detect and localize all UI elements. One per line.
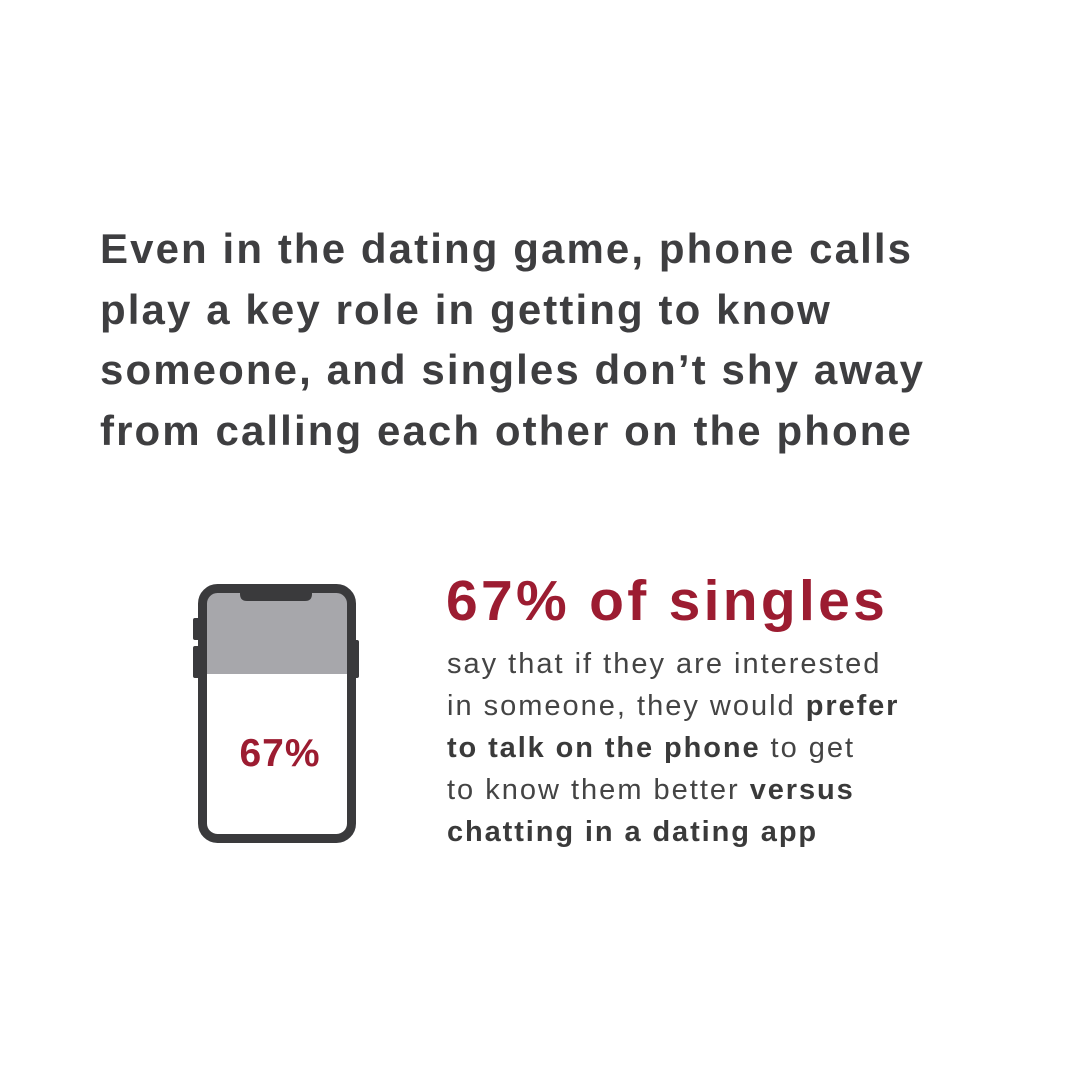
title: from calling each other on the phone bbox=[100, 406, 913, 454]
title: play a key role in getting to know bbox=[100, 286, 832, 332]
title bbox=[100, 225, 925, 454]
icon: phone with 67% bbox=[193, 584, 359, 843]
icon: phone with 67%: 67% bbox=[239, 732, 321, 775]
text block: description bbox=[447, 648, 899, 848]
heading: 67% of singles: 67% of singles bbox=[446, 569, 888, 633]
text block: description: chatting in a dating app bbox=[447, 816, 818, 848]
text block: description: in someone, they would prefer bbox=[447, 690, 899, 722]
title: someone, and singles don’t shy away bbox=[100, 346, 925, 393]
text block: description: to know them better versus bbox=[447, 774, 855, 806]
title: Even in the dating game, phone calls bbox=[100, 225, 913, 272]
text block: description: say that if they are interested bbox=[447, 648, 881, 680]
text block: description: to talk on the phone to get bbox=[447, 732, 855, 764]
